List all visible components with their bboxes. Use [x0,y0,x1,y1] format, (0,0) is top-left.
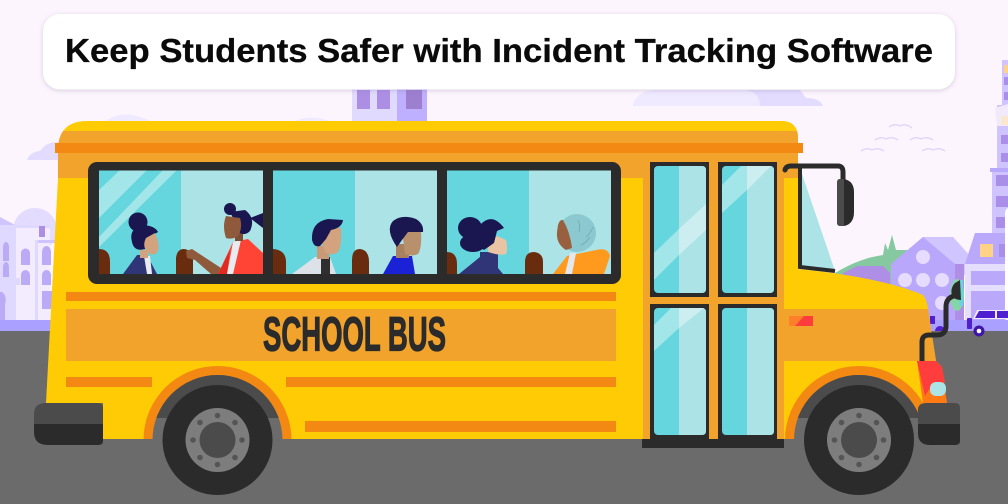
door: upper right pane [718,162,777,297]
title banner [43,14,955,90]
window pane 3 [447,170,611,274]
door: lower left pane [650,304,709,439]
car [930,310,1008,336]
passenger 1 [123,212,159,274]
door: upper left pane [650,162,709,297]
seat [273,249,286,274]
car wheel [974,326,984,336]
passenger 2 [186,203,263,274]
side stripes lower [66,377,616,432]
rear bumper [34,403,103,445]
seat [176,249,193,274]
banner card [43,14,955,90]
side stripe upper [66,292,616,301]
side marker light [789,316,813,326]
title text: Keep Students Safer with Incident Tracking Software [65,32,933,69]
front pillar [784,178,798,273]
front wheel [785,366,924,495]
houses: right [891,208,1008,322]
passenger 5 [458,217,507,274]
seat [525,252,543,274]
door section [643,153,784,439]
passenger 6 [553,214,610,274]
passenger 3 [292,219,343,274]
street strip [0,320,1008,332]
side mirror [785,166,854,226]
building: top centre [352,88,427,121]
windshield [800,168,835,271]
door: lower right pane [718,304,777,439]
buildings: right tower [990,60,1008,234]
window pane 1 [99,170,263,274]
seat [447,252,457,274]
front bumper [918,403,960,445]
front mirror [922,280,961,361]
seat [99,249,110,274]
window divider bars [263,170,447,274]
name panel [66,309,616,361]
seat [352,249,369,274]
front orange panel [784,309,936,361]
rear wheel [144,366,292,504]
car wheel centre [977,329,981,333]
roof rail [55,143,803,153]
roof bands [50,131,810,178]
passenger window frame [88,162,621,284]
buildings: left [0,208,57,322]
front lamp [917,361,947,403]
clouds [27,90,823,160]
bus body [46,121,936,439]
bus [34,121,961,504]
green hill [835,235,907,290]
birds [861,125,945,151]
bus name: SCHOOL BUS [263,308,446,362]
window pane 2 [273,170,437,274]
road [0,331,1008,504]
passenger 4 [383,217,423,274]
door sill [642,439,784,448]
